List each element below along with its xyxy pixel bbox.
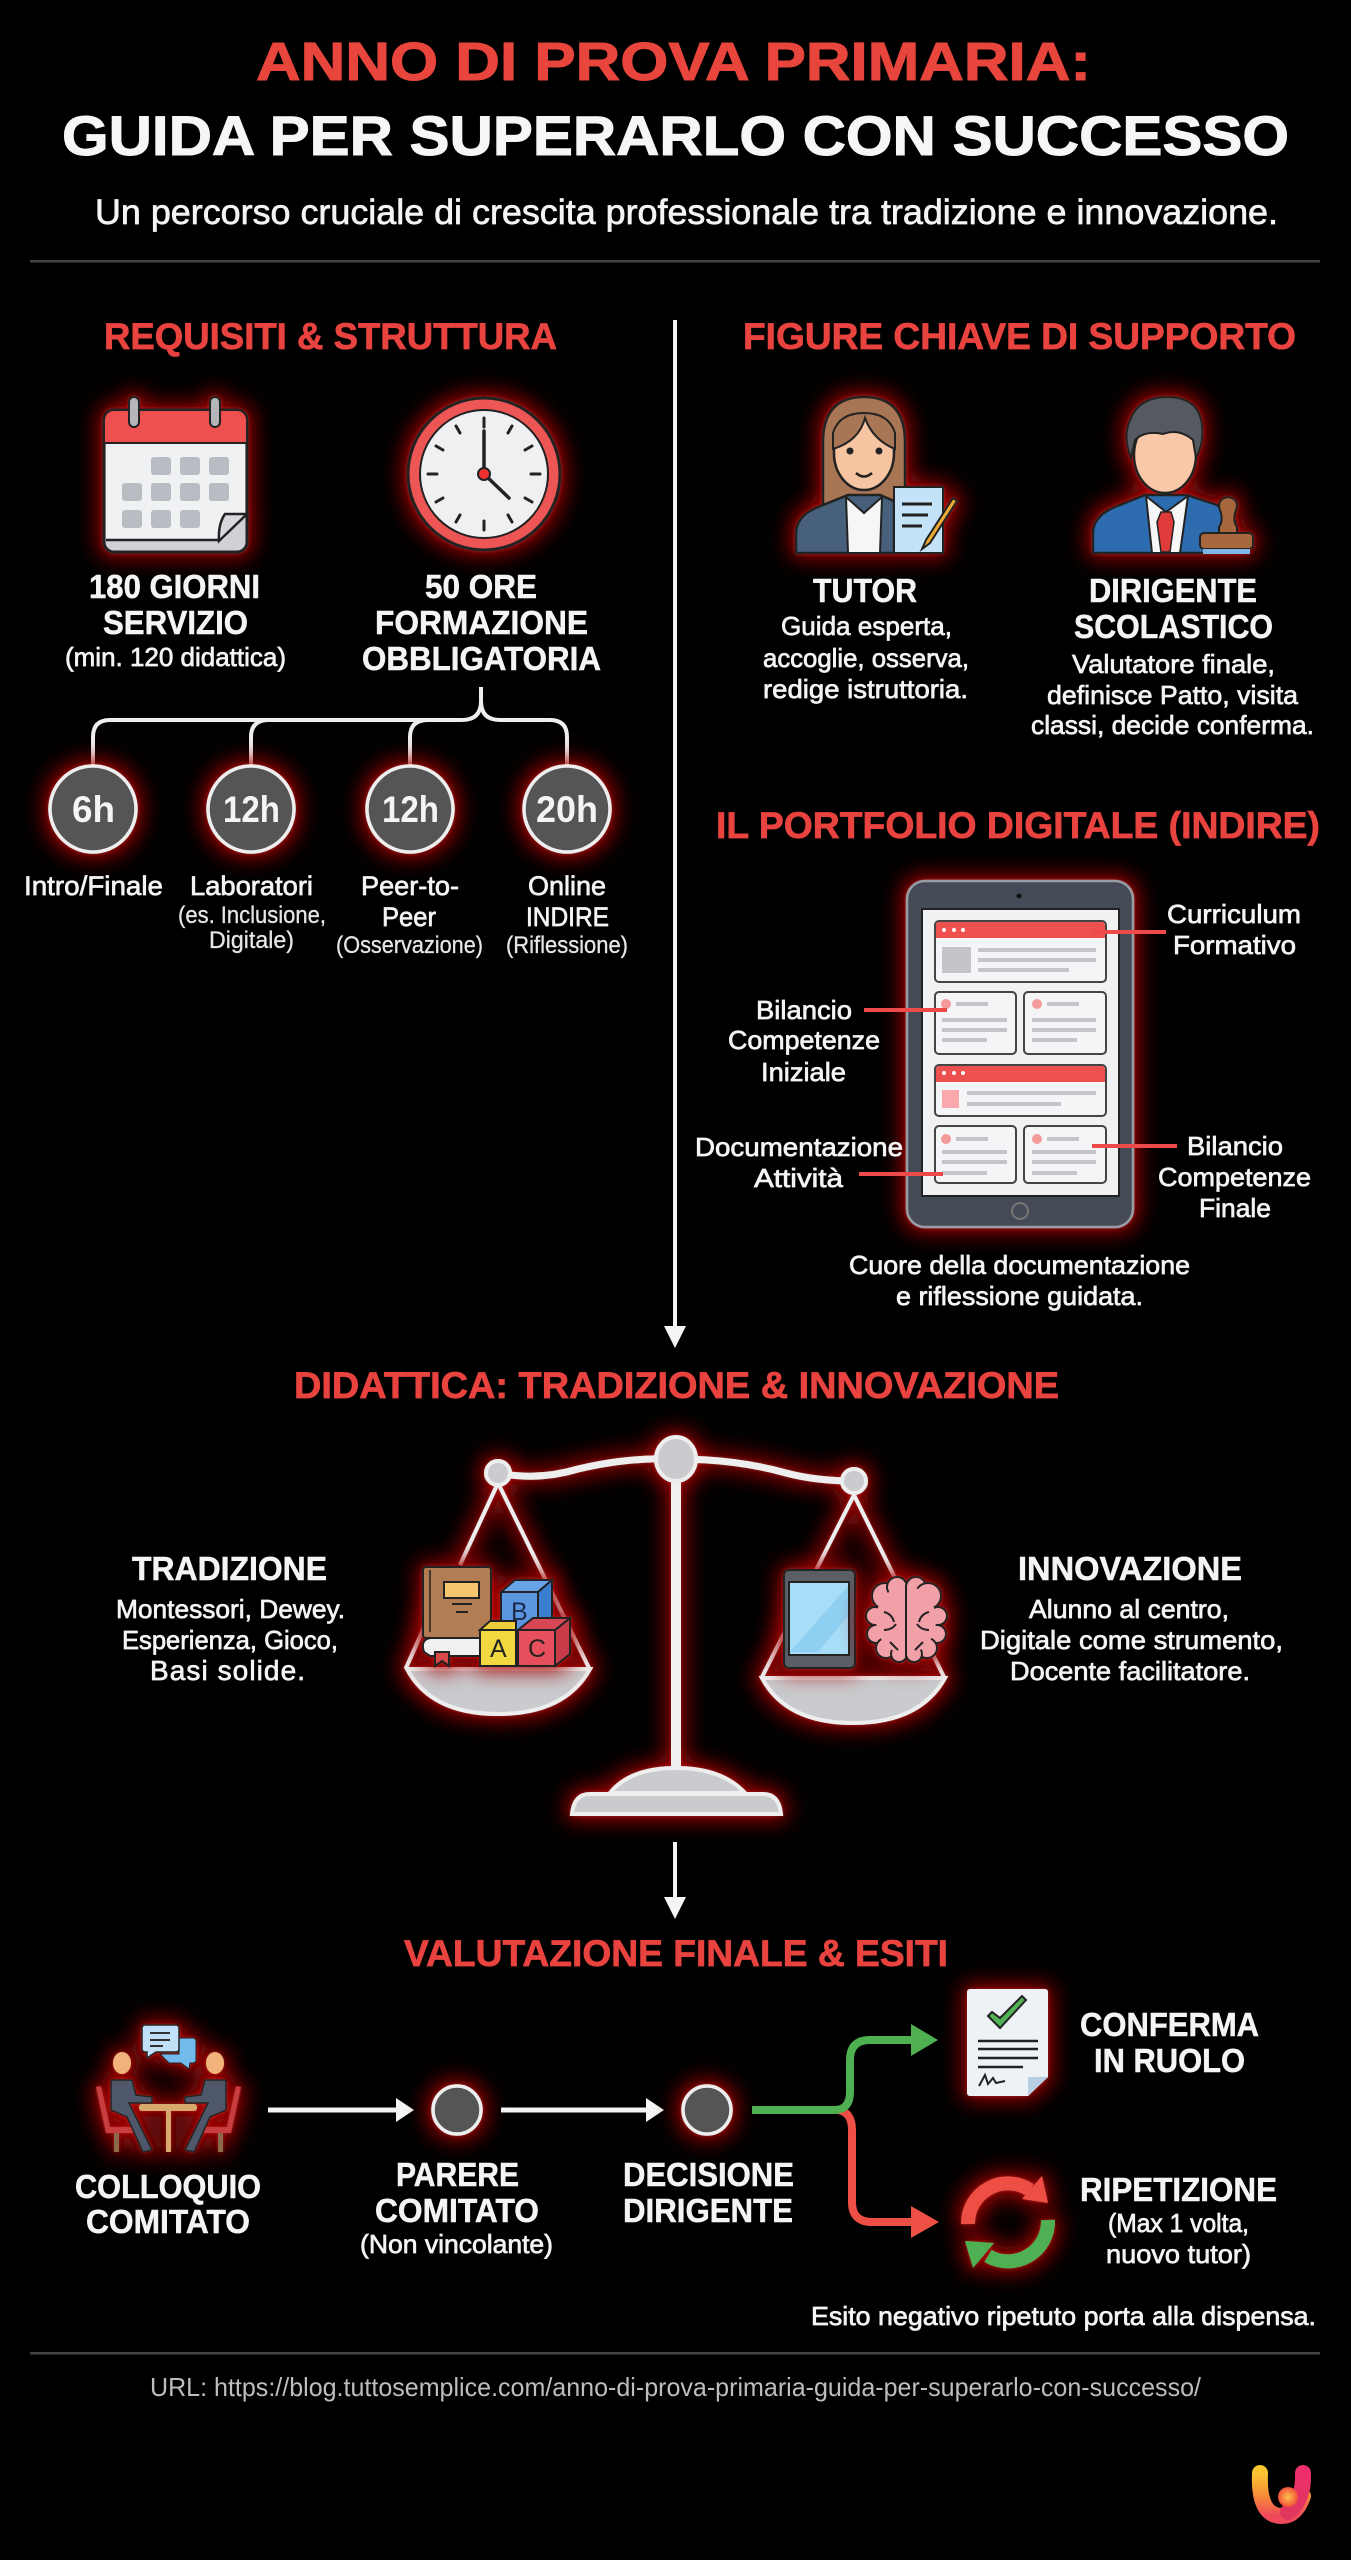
label: tradizione [116, 1550, 345, 1686]
label: laboratori: Laboratori [190, 871, 313, 901]
circle: 20h: 20h [536, 789, 598, 830]
heading: didattica: DIDATTICA: TRADIZIONE & INNOVAZIONE [294, 1365, 1059, 1406]
label: innovazione [980, 1550, 1283, 1686]
label: tradizione: TRADIZIONE [132, 1550, 327, 1587]
icon: calendar [104, 397, 247, 552]
label: tutor: TUTOR [813, 572, 917, 609]
icon: books and blocks: C [528, 1635, 546, 1663]
label: tradizione: Esperienza, Gioco, [122, 1625, 338, 1655]
label: 180 giorni: SERVIZIO [103, 604, 248, 641]
icon: mini tablet [784, 1570, 855, 1668]
label: decisione: DIRIGENTE [623, 2192, 793, 2229]
label: curriculum: Formativo [1173, 930, 1296, 960]
icon: books and blocks: B [511, 1598, 528, 1626]
label: 50 ore: OBBLIGATORIA [362, 640, 601, 677]
label: 180 giorni [65, 568, 286, 672]
label: ripetizione: (Max 1 volta, [1108, 2208, 1249, 2238]
label: tradizione: Basi solide. [150, 1655, 305, 1686]
label: online indire: INDIRE [526, 902, 609, 932]
label: online indire: Online [528, 871, 606, 901]
label: dirigente: classi, decide conferma. [1031, 710, 1314, 740]
label: innovazione: Digitale come strumento, [980, 1625, 1283, 1655]
label: ripetizione: RIPETIZIONE [1080, 2171, 1277, 2208]
label: curriculum: Curriculum [1167, 899, 1301, 929]
label: innovazione: INNOVAZIONE [1018, 1550, 1242, 1587]
label: 50 ore: 50 ORE [425, 568, 537, 605]
label: decisione: DECISIONE [623, 2156, 794, 2193]
icon: repeat cycle [965, 2176, 1048, 2268]
icon: tutor [796, 397, 957, 553]
icon: tablet [907, 881, 1133, 1227]
caption: portfolio: Cuore della documentazione [849, 1250, 1190, 1280]
label: parere [360, 2156, 553, 2259]
node: decisione [683, 2086, 731, 2134]
arrow: to evaluation [664, 1842, 686, 1919]
circle: 12h lab [208, 766, 294, 852]
label: colloquio: COLLOQUIO [75, 2168, 261, 2205]
label: 50 ore: FORMAZIONE [375, 604, 588, 641]
arrow: central vertical flow [664, 320, 686, 1348]
label: parere: (Non vincolante) [360, 2229, 553, 2259]
label: peer to peer: (Osservazione) [336, 932, 483, 959]
arrow: colloquio to parere [268, 2098, 414, 2122]
panel: requisiti e struttura [24, 316, 628, 959]
panel: figure chiave [743, 316, 1314, 740]
label: bilancio finale: Finale [1199, 1193, 1271, 1223]
scale frame [406, 1437, 945, 1814]
icon: books and blocks [423, 1567, 570, 1666]
label: parere: PARERE [396, 2156, 519, 2193]
hours circles [50, 766, 610, 852]
label: tutor: accoglie, osserva, [763, 643, 969, 673]
heading: portfolio: IL PORTFOLIO DIGITALE (INDIRE) [716, 805, 1320, 846]
icon: logo [1260, 2473, 1303, 2516]
note: esito negativo: Esito negativo ripetuto porta alla dispensa. [811, 2301, 1316, 2331]
icon: dirigente [1093, 397, 1253, 554]
heading: figure chiave: FIGURE CHIAVE DI SUPPORTO [743, 316, 1296, 357]
label: curriculum [1167, 899, 1301, 960]
label: bilancio finale: Bilancio [1187, 1131, 1283, 1161]
label: 50 ore [362, 568, 601, 677]
label: laboratori [178, 871, 326, 954]
label: conferma [1080, 2006, 1259, 2079]
label: conferma: IN RUOLO [1094, 2042, 1245, 2079]
icon: clock [408, 398, 560, 550]
label: peer to peer [336, 871, 483, 959]
arrow: green branch [752, 2024, 938, 2110]
arrow: red branch [838, 2110, 939, 2238]
label: 180 giorni: 180 GIORNI [89, 568, 260, 605]
bracket connector [93, 687, 567, 767]
arrow: parere to decisione [501, 2098, 664, 2122]
source url: URL: https://blog.tuttosemplice.com/anno-di-prova-primaria-guida-per-superarlo-con-successo/ [150, 2372, 1202, 2402]
heading: valutazione: VALUTAZIONE FINALE & ESITI [404, 1933, 948, 1974]
label: dirigente: Valutatore finale, [1072, 649, 1275, 679]
subtitle: Un percorso cruciale di crescita professionale tra tradizione e innovazione. [95, 193, 1278, 232]
label: bilancio finale [1158, 1131, 1311, 1223]
label: colloquio [75, 2168, 261, 2240]
label: bilancio iniziale: Iniziale [761, 1057, 846, 1087]
label: conferma: CONFERMA [1080, 2006, 1259, 2043]
panel: valutazione finale [75, 1933, 1316, 2331]
icon: colloquio [96, 2025, 241, 2152]
label: decisione [623, 2156, 794, 2229]
callout lines [859, 930, 1177, 1176]
label: dirigente: DIRIGENTE [1089, 572, 1257, 609]
icon: brain [866, 1577, 947, 1662]
label: documentazione [695, 1132, 903, 1193]
circle: 12h lab: 12h [223, 789, 280, 830]
label: tutor [763, 572, 969, 704]
label: online indire: (Riflessione) [506, 932, 628, 959]
label: innovazione: Docente facilitatore. [1010, 1656, 1250, 1686]
title: GUIDA PER SUPERARLO CON SUCCESSO [62, 104, 1289, 167]
panel: didattica [116, 1365, 1283, 1814]
label: 180 giorni: (min. 120 didattica) [65, 642, 286, 672]
label: tutor: Guida esperta, [781, 611, 952, 641]
label: parere: COMITATO [375, 2192, 539, 2229]
circle: 12h peer: 12h [382, 789, 439, 830]
circle: 12h peer [367, 766, 453, 852]
caption: portfolio: e riflessione guidata. [896, 1281, 1143, 1311]
label: documentazione: Attività [754, 1163, 844, 1193]
icon: books and blocks: A [490, 1635, 507, 1663]
label: bilancio iniziale: Competenze [728, 1025, 880, 1055]
node: parere [433, 2086, 481, 2134]
label: innovazione: Alunno al centro, [1029, 1594, 1229, 1624]
label: peer to peer: Peer [382, 902, 436, 932]
label: peer to peer: Peer-to- [361, 871, 459, 901]
label: ripetizione [1080, 2171, 1277, 2269]
circle: 6h [50, 766, 136, 852]
icon: balance scale [406, 1437, 947, 1814]
label: documentazione: Documentazione [695, 1132, 903, 1162]
circle: 20h [524, 766, 610, 852]
label: intro finale: Intro/Finale [24, 871, 163, 901]
label: ripetizione: nuovo tutor) [1106, 2239, 1251, 2269]
icon: signed document [967, 1989, 1048, 2096]
label: dirigente [1031, 572, 1314, 740]
label: laboratori: Digitale) [209, 927, 294, 954]
title [62, 32, 1289, 167]
circle: 6h: 6h [72, 789, 115, 830]
caption: portfolio [849, 1250, 1190, 1311]
label: bilancio iniziale [728, 995, 880, 1087]
label: colloquio: COMITATO [86, 2203, 250, 2240]
label: tutor: redige istruttoria. [763, 674, 968, 704]
label: bilancio iniziale: Bilancio [756, 995, 852, 1025]
label: bilancio finale: Competenze [1158, 1162, 1311, 1192]
label: laboratori: (es. Inclusione, [178, 902, 326, 929]
label: dirigente: definisce Patto, visita [1047, 680, 1299, 710]
title: ANNO DI PROVA PRIMARIA: [256, 32, 1091, 92]
header [62, 32, 1289, 232]
label: tradizione: Montessori, Dewey. [116, 1594, 345, 1624]
panel: portfolio digitale [695, 805, 1320, 1311]
label: dirigente: SCOLASTICO [1074, 608, 1273, 645]
heading: requisiti: REQUISITI & STRUTTURA [104, 316, 557, 357]
label: online indire [506, 871, 628, 959]
